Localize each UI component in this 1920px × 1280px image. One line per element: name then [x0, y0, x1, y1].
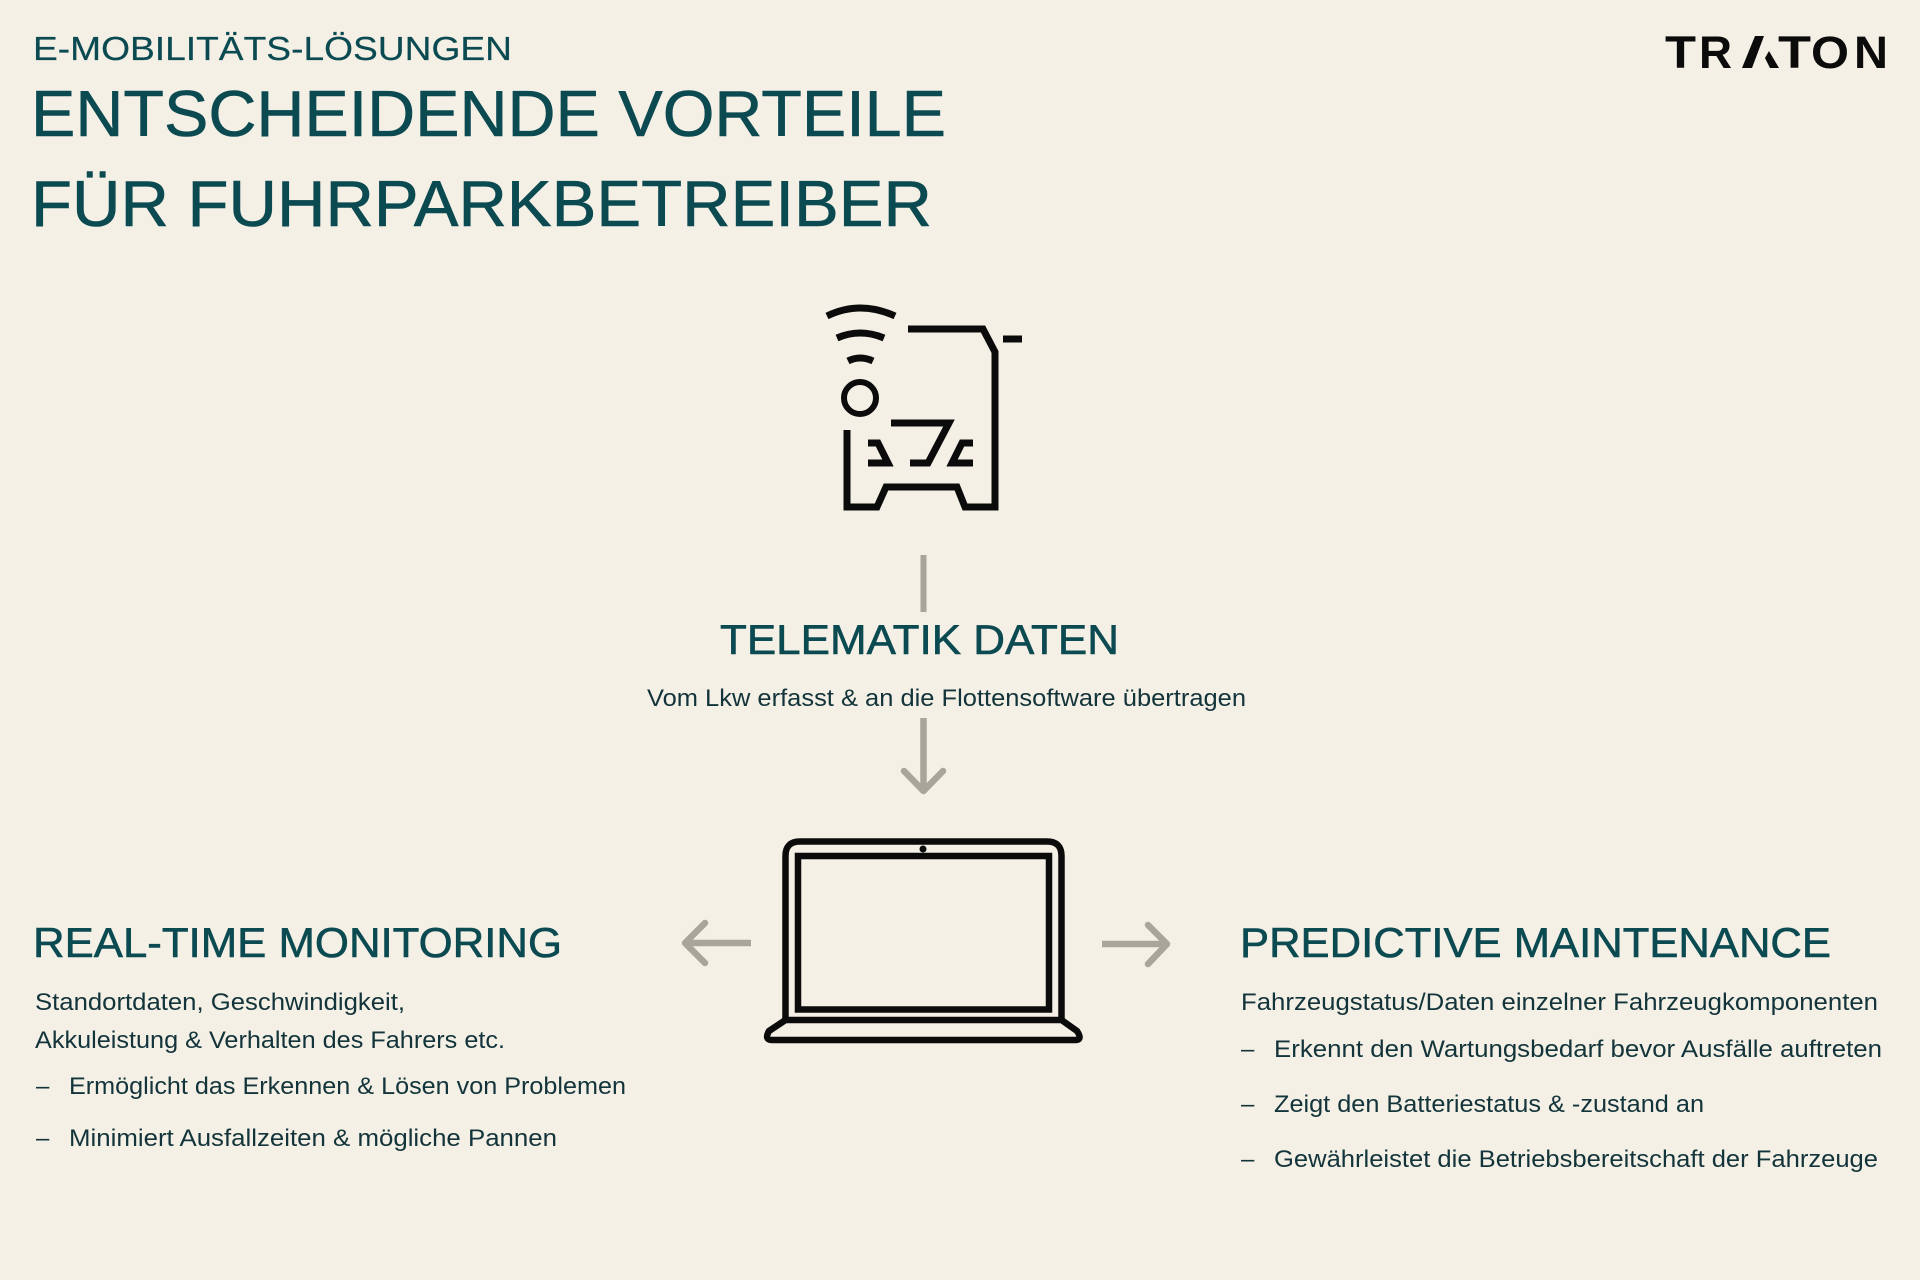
- bullet list: Minimiert Ausfallzeiten & mögliche Pannen: [69, 1125, 557, 1152]
- heading: predictive maintenance: PREDICTIVE MAINTENANCE: [1240, 919, 1831, 966]
- logo: TRATON: O: [1811, 27, 1849, 78]
- logo: TRATON: [1665, 27, 1888, 78]
- title: ENTSCHEIDENDE VORTEILE: [31, 77, 946, 150]
- logo: TRATON: T: [1665, 27, 1696, 78]
- eyebrow heading: E-MOBILITÄTS-LÖSUNGEN: [33, 30, 512, 67]
- panel: real-time monitoring: [33, 919, 626, 1152]
- bullet list: Gewährleistet die Betriebsbereitschaft der Fahrzeuge: [1274, 1146, 1878, 1173]
- panel: predictive maintenance: [1240, 919, 1882, 1173]
- bullet list: Zeigt den Batteriestatus & -zustand an: [1274, 1091, 1704, 1118]
- text: telematics description: Vom Lkw erfasst & an die Flottensoftware übertragen: [647, 685, 1246, 712]
- bullet list: –: [36, 1073, 50, 1100]
- logo: TRATON: T: [1778, 27, 1811, 78]
- heading: real-time monitoring: REAL-TIME MONITORING: [33, 919, 562, 966]
- title: [31, 77, 946, 240]
- bullet list: [36, 1073, 626, 1152]
- icon: connected truck: [827, 308, 1022, 507]
- bullet list: –: [1241, 1091, 1255, 1118]
- bullet list: –: [1241, 1146, 1255, 1173]
- text: data description: Akkuleistung & Verhalten des Fahrers etc.: [35, 1027, 505, 1054]
- bullet list: Erkennt den Wartungsbedarf bevor Ausfälle auftreten: [1274, 1036, 1882, 1063]
- heading: Telematik Daten: TELEMATIK DATEN: [720, 616, 1119, 663]
- arrow: right: [1102, 925, 1167, 964]
- bullet list: –: [1241, 1036, 1255, 1063]
- bullet list: –: [36, 1125, 50, 1152]
- logo: TRATON: R: [1699, 27, 1732, 78]
- logo: TRATON: N: [1854, 27, 1888, 78]
- text: vehicle status: Fahrzeugstatus/Daten einzelner Fahrzeugkomponenten: [1241, 989, 1878, 1016]
- arrow: left: [685, 923, 751, 963]
- connector line: [920, 555, 926, 612]
- icon: laptop: [767, 842, 1080, 1040]
- text: data description: Standortdaten, Geschwindigkeit,: [35, 989, 405, 1016]
- bullet list: [1241, 1036, 1882, 1173]
- title: FÜR FUHRPARKBETREIBER: [31, 167, 932, 240]
- text: data description: [35, 989, 505, 1054]
- arrow: down: [904, 718, 943, 791]
- bullet list: Ermöglicht das Erkennen & Lösen von Problemen: [69, 1073, 626, 1100]
